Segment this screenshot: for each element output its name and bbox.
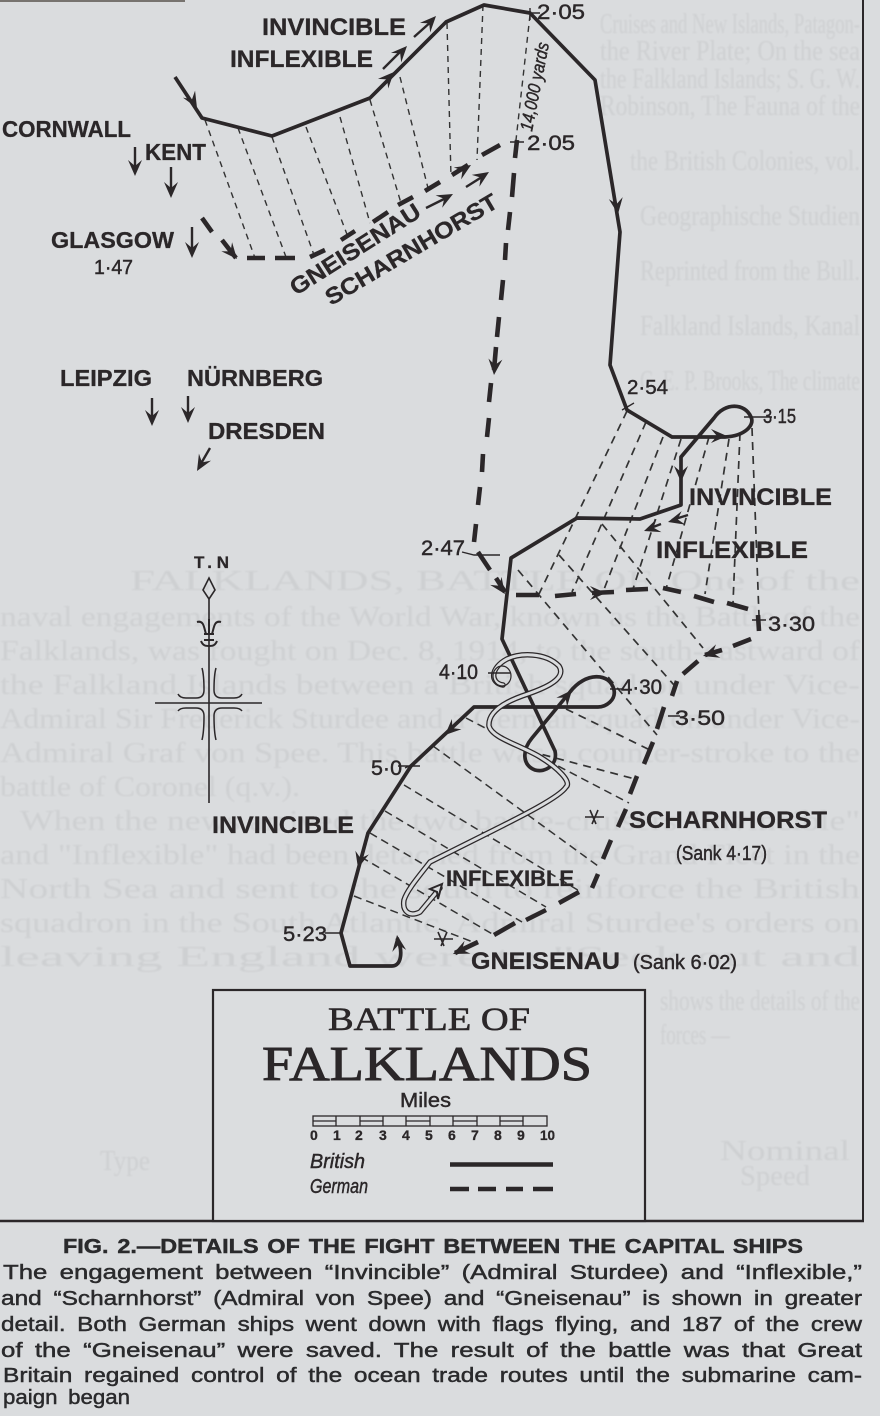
caption body: detail. Both German ships went down with flags flying, and 187 of the crew [1, 1314, 863, 1336]
show-through text from reverse page: the Falkland Islands between a British squadron under Vice- [0, 670, 860, 701]
show-through text from reverse page: North Sea and sent to the south to reinforce the British [0, 874, 860, 905]
scale numbers: 4 [402, 1127, 410, 1143]
caption body [1, 1262, 863, 1409]
dashed lines of fire: third phase [354, 718, 629, 944]
scale numbers [310, 1127, 555, 1143]
scale numbers: 1 [333, 1127, 341, 1143]
labels: times: 2·47 [421, 537, 465, 560]
German track: dashed line [202, 140, 759, 953]
label: range 14,000 yards: 14,000 yards [516, 41, 553, 133]
show-through text from reverse page: FALKLANDS, BATTLE OF. One of the [130, 566, 860, 597]
scale numbers: 9 [517, 1127, 525, 1143]
caption body: and “Scharnhorst” (Admiral von Spee) and “Gneisenau” is shown in greater [1, 1288, 862, 1310]
caption heading: FIG. 2.—DETAILS OF THE FIGHT BETWEEN THE CAPITAL SHIPS [63, 1236, 803, 1258]
labels: ship names: (Sank 6·02) [633, 952, 737, 974]
British track: Inflexible double line [404, 655, 567, 914]
caption body: Britain regained control of the ocean trade routes until the submarine cam- [3, 1365, 862, 1387]
labels: ship names: GLASGOW [51, 227, 174, 253]
labels: ship names: (Sank 4·17) [676, 843, 767, 865]
arrow: Inflexible outlined arrowhead [430, 884, 442, 899]
labels: times: 4·30 [621, 676, 662, 699]
labels: ship names: CORNWALL [2, 116, 131, 142]
legend title: Battle of: BATTLE OF [328, 1002, 530, 1038]
labels: times: 4·10 [439, 661, 478, 684]
labels: ship names: GNEISENAU [285, 198, 425, 300]
legend panel: title, scale, key [213, 990, 645, 1221]
caption body: paign began [3, 1387, 130, 1409]
show-through text from reverse page: leaving England were to "Seek out and [0, 942, 860, 973]
labels: times: 3·15 [763, 406, 796, 428]
sinking marks [434, 810, 604, 946]
show-through text from reverse page: Nominal [720, 1136, 850, 1167]
labels: ship names: DRESDEN [208, 418, 325, 444]
show-through text from reverse page: Type [100, 1146, 150, 1177]
labels: times: 1·47 [94, 257, 133, 279]
labels: times: 2·05 [527, 132, 575, 155]
labels: ship names: LEIPZIG [60, 365, 152, 391]
scale label: Miles: Miles [400, 1090, 451, 1112]
labels: times: 5·23 [283, 923, 327, 946]
labels: times: 2·05 [537, 1, 585, 24]
key: British: British [310, 1151, 365, 1173]
scale numbers: 6 [448, 1127, 456, 1143]
show-through text from reverse page: naval engagements of the World War, known as the Battle of the [0, 602, 860, 633]
show-through text from reverse page: Falklands, was fought on Dec. 8, 1914, to the south-eastward of [0, 636, 861, 667]
show-through text from reverse page: Admiral Sir Frederick Sturdee and a German squadron under Vice- [0, 704, 860, 735]
key: German: German [310, 1176, 368, 1198]
position ticks on tracks [249, 8, 772, 933]
show-through text from reverse page: When the news arrived the two battle-cruisers "Invincible" [20, 806, 860, 837]
legend title: Falklands: FALKLANDS [262, 1036, 592, 1091]
labels: times: 3·30 [768, 613, 815, 636]
labels: ship names: INFLEXIBLE [656, 537, 808, 564]
labels: ship names: GNEISENAU [471, 948, 620, 975]
labels: ship names [2, 14, 832, 975]
British track: Invincible solid line [175, 5, 752, 966]
labels: ship names: SCHARNHORST [629, 807, 827, 834]
labels: ship names: INVINCIBLE [262, 14, 406, 41]
labels: times [94, 1, 815, 946]
labels: times: 2·54 [627, 377, 668, 399]
labels: times: 5·0 [371, 757, 402, 780]
labels: ship names: NÜRNBERG [187, 365, 323, 391]
arrowheads: British track [183, 67, 727, 952]
show-through text from reverse page: Speed [740, 1161, 810, 1192]
scale numbers: 7 [471, 1127, 479, 1143]
arrows: direction of ships [128, 11, 688, 538]
compass: true north: T.N [194, 553, 229, 572]
dashed lines of fire: first phase [205, 5, 530, 258]
labels: ship names: INFLEXIBLE [230, 46, 373, 73]
compass: true north [155, 553, 262, 803]
scale numbers: 8 [494, 1127, 502, 1143]
show-through text from reverse page: and "Inflexible" had been detached from the Grand Fleet in the [0, 840, 860, 871]
caption body: of the “Gneisenau” were saved. The result of the battle was that Great [1, 1340, 863, 1362]
labels: ship names: INVINCIBLE [212, 812, 354, 839]
scale bar [313, 1116, 547, 1126]
labels: ship names: INFLEXIBLE [446, 866, 574, 891]
show-through text from reverse page: Admiral Graf von Spee. This battle was a counter-stroke to the [0, 738, 860, 769]
dashed lines of fire: second phase [518, 411, 759, 779]
scale numbers: 3 [379, 1127, 387, 1143]
scale numbers: 0 [310, 1127, 318, 1143]
caption body: The engagement between “Invincible” (Admiral Sturdee) and “Inflexible,” [3, 1262, 862, 1284]
labels: ship names: SCHARNHORST [320, 188, 502, 310]
scale numbers: 10 [540, 1127, 555, 1143]
labels: times: 3·50 [675, 707, 725, 730]
scale numbers: 2 [355, 1127, 363, 1143]
scale numbers: 5 [425, 1127, 433, 1143]
labels: ship names: KENT [145, 139, 206, 165]
show-through text from reverse page: forces — [660, 1020, 731, 1051]
show-through text from reverse page: squadron in the South Atlantic. Admiral Sturdee's orders on [0, 908, 860, 939]
arrowheads: German track [221, 159, 720, 960]
show-through text from reverse page: battle of Coronel (q.v.). [0, 772, 300, 803]
labels: ship names: INVINCIBLE [689, 484, 832, 511]
